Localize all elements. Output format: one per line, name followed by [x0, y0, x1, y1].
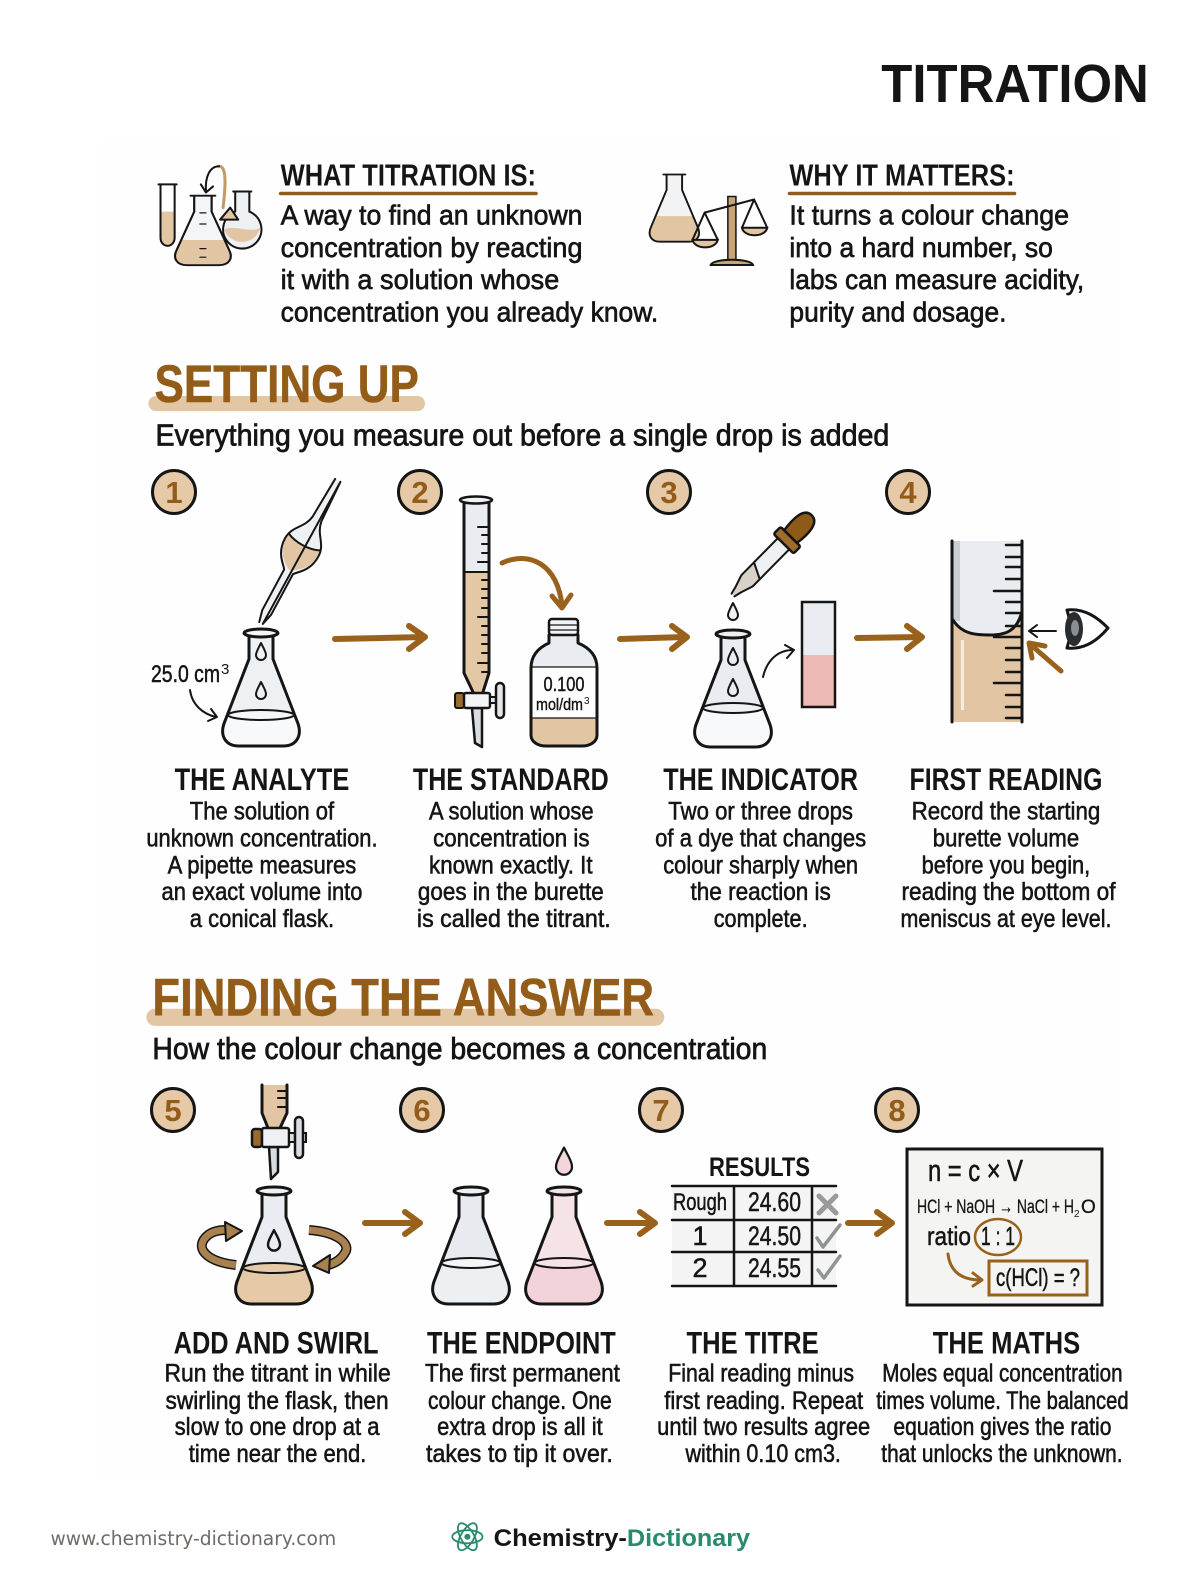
text block: A pipette measures	[168, 853, 356, 880]
text block: concentration you already know.	[281, 295, 658, 327]
arrow: step 6 to 7	[607, 1212, 655, 1234]
number badge 4	[886, 470, 930, 514]
arrow: step 3 to 4	[857, 626, 922, 649]
results table: 24.55	[748, 1253, 801, 1283]
text block: concentration by reacting	[281, 231, 582, 263]
panel: step 8 the maths	[876, 1088, 1129, 1468]
panel: what titration is	[158, 159, 658, 327]
results table: 2	[692, 1253, 708, 1283]
text block: within 0.10 cm3.	[685, 1441, 841, 1468]
text block	[281, 199, 658, 327]
text block: Run the titrant in while	[165, 1361, 391, 1388]
arrow: step 7 to 8	[848, 1212, 892, 1234]
label: volume: 3	[221, 661, 229, 678]
icon: falling drop	[728, 603, 738, 620]
text block: goes in the burette	[418, 879, 604, 906]
text block	[417, 798, 611, 933]
worked equation card: ratio	[927, 1221, 971, 1251]
text block: Two or three drops	[668, 798, 853, 825]
text block: known exactly. It	[429, 853, 593, 880]
title: TITRATION	[881, 55, 1149, 114]
arrow: step 5 to 6	[365, 1212, 420, 1234]
arrow: eye line	[1029, 625, 1056, 637]
arrow: to sample	[763, 645, 794, 677]
icon: standard bottle: mol/dm	[536, 695, 583, 714]
arrow: step 1 to 2	[335, 626, 425, 649]
results table: RESULTS	[709, 1152, 810, 1182]
icon: glassware	[158, 166, 261, 265]
worked equation card	[907, 1149, 1102, 1305]
heading: setting up: SETTING UP	[154, 356, 419, 414]
number badge 1	[152, 470, 196, 514]
text block: an exact volume into	[162, 879, 362, 906]
icon: flask and balance	[650, 175, 767, 265]
icon: burette tap	[252, 1085, 306, 1179]
text block: It turns a colour change	[789, 199, 1069, 231]
title: THE TITRE	[686, 1325, 819, 1360]
icon: swirl arrow right	[309, 1230, 346, 1273]
text block: Record the starting	[912, 798, 1100, 825]
icon: standard bottle: 0.100	[544, 674, 584, 696]
text block: Moles equal concentration	[882, 1361, 1123, 1388]
number badge 5: 5	[164, 1093, 182, 1128]
number badge 4: 4	[899, 475, 917, 510]
panel: step 1 the analyte	[146, 470, 378, 933]
icon: colour sample	[802, 602, 835, 707]
text block: complete.	[714, 906, 808, 933]
text block: takes to tip it over.	[426, 1441, 613, 1468]
text block	[789, 199, 1084, 327]
title: ADD AND SWIRL	[174, 1325, 379, 1360]
worked equation card: HCl + NaOH → NaCl + H	[917, 1197, 1074, 1218]
text block: time near the end.	[189, 1441, 366, 1468]
worked equation card: 1 : 1	[981, 1221, 1015, 1251]
panel: step 6 the endpoint	[400, 1088, 620, 1468]
text block: colour sharply when	[663, 853, 858, 880]
icon: dropper	[723, 505, 822, 605]
worked equation card: O	[1081, 1197, 1096, 1218]
icon: meniscus scale	[952, 541, 1022, 722]
arrow: reading point	[1029, 643, 1061, 671]
number badge 5	[152, 1088, 194, 1132]
panel: step 7 the titre	[640, 1088, 870, 1468]
icon: pipette	[244, 471, 355, 632]
number badge 2: 2	[411, 475, 429, 510]
results table: 1	[692, 1221, 708, 1251]
title: THE MATHS	[933, 1325, 1080, 1360]
number badge 2	[398, 470, 442, 514]
text block: labs can measure acidity,	[789, 263, 1084, 295]
heading: WHAT TITRATION IS:	[281, 159, 536, 192]
icon: conical flask	[236, 1187, 312, 1304]
footer: logo	[452, 1520, 751, 1553]
text block: a conical flask.	[190, 906, 334, 933]
results table: Rough	[673, 1189, 727, 1216]
text block: colour change. One	[428, 1388, 612, 1415]
number badge 6	[400, 1088, 444, 1132]
title: THE ANALYTE	[175, 762, 349, 797]
icon: eye	[1065, 610, 1108, 648]
text block: swirling the flask, then	[166, 1388, 389, 1415]
worked equation card: 2	[1074, 1209, 1080, 1220]
text block: concentration is	[433, 825, 590, 852]
arrow: curved	[502, 558, 571, 608]
panel: step 5 add and swirl	[152, 1085, 391, 1468]
panel: step 3 the indicator	[648, 470, 866, 933]
icon: standard bottle	[531, 619, 597, 746]
worked equation card: c(HCl) = ?	[996, 1264, 1080, 1292]
text block: that unlocks the unknown.	[881, 1441, 1123, 1468]
heading: WHY IT MATTERS:	[789, 159, 1015, 192]
icon: conical flask	[223, 629, 299, 746]
subtitle: setting up: Everything you measure out before a single drop is added	[155, 419, 889, 452]
text block: slow to one drop at a	[175, 1414, 380, 1441]
heading: finding the answer: FINDING THE ANSWER	[152, 970, 654, 1028]
subtitle: finding the answer: How the colour change becomes a concentration	[152, 1033, 767, 1066]
text block: the reaction is	[690, 879, 831, 906]
title: THE STANDARD	[413, 762, 609, 797]
icon: pink flask	[526, 1187, 602, 1304]
text block: of a dye that changes	[655, 825, 866, 852]
number badge 1: 1	[165, 475, 183, 510]
footer: logo: Chemistry-	[494, 1525, 627, 1552]
arrow: step 2 to 3	[620, 626, 687, 649]
text block	[876, 1361, 1129, 1468]
label: volume	[151, 661, 229, 721]
text block: equation gives the ratio	[893, 1414, 1111, 1441]
text block: extra drop is all it	[437, 1414, 603, 1441]
worked equation card: n = c × V	[928, 1153, 1023, 1188]
panel: why it matters	[650, 159, 1084, 327]
text block: A solution whose	[429, 798, 594, 825]
text block: until two results agree	[657, 1414, 870, 1441]
number badge 7: 7	[652, 1093, 670, 1128]
text block: reading the bottom of	[901, 879, 1116, 906]
results table: 24.60	[748, 1187, 801, 1217]
icon: standard bottle: 3	[584, 696, 590, 707]
number badge 3	[648, 470, 690, 514]
icon: conical flask	[695, 630, 771, 747]
text block: is called the titrant.	[417, 906, 611, 933]
text block: The solution of	[190, 798, 334, 825]
icon: burette	[455, 496, 504, 747]
text block	[146, 798, 378, 933]
title: FIRST READING	[910, 762, 1102, 797]
footer: website: www.chemistry-dictionary.com	[50, 1527, 336, 1550]
number badge 3: 3	[660, 475, 678, 510]
text block	[900, 798, 1116, 933]
panel: step 4 first reading	[886, 470, 1116, 933]
title: THE ENDPOINT	[427, 1325, 616, 1360]
text block	[657, 1361, 870, 1468]
results table	[672, 1152, 840, 1286]
panel: step 2 the standard	[398, 470, 611, 933]
text block: it with a solution whose	[281, 263, 559, 295]
text block: burette volume	[933, 825, 1079, 852]
text block: into a hard number, so	[789, 231, 1053, 263]
icon: clear flask	[433, 1187, 509, 1304]
text block: A way to find an unknown	[281, 199, 582, 231]
text block	[425, 1361, 620, 1468]
text block: before you begin,	[922, 853, 1090, 880]
label: volume: 25.0 cm	[151, 661, 220, 688]
title: THE INDICATOR	[663, 762, 858, 797]
text block	[165, 1361, 391, 1468]
number badge 8	[876, 1088, 918, 1132]
number badge 6: 6	[413, 1093, 431, 1128]
number badge 7	[640, 1088, 682, 1132]
text block: unknown concentration.	[146, 825, 378, 852]
text block: purity and dosage.	[789, 295, 1006, 327]
text block: Final reading minus	[668, 1361, 854, 1388]
text block: The first permanent	[425, 1361, 620, 1388]
icon: swirl arrow left	[202, 1222, 242, 1265]
text block	[655, 798, 866, 933]
text block: first reading. Repeat	[664, 1388, 863, 1415]
icon: pink drop	[556, 1148, 572, 1175]
footer: logo: Dictionary	[627, 1525, 751, 1552]
text block: meniscus at eye level.	[900, 906, 1111, 933]
results table: 24.50	[748, 1221, 801, 1251]
number badge 8: 8	[888, 1093, 906, 1128]
text block: times volume. The balanced	[876, 1388, 1129, 1415]
